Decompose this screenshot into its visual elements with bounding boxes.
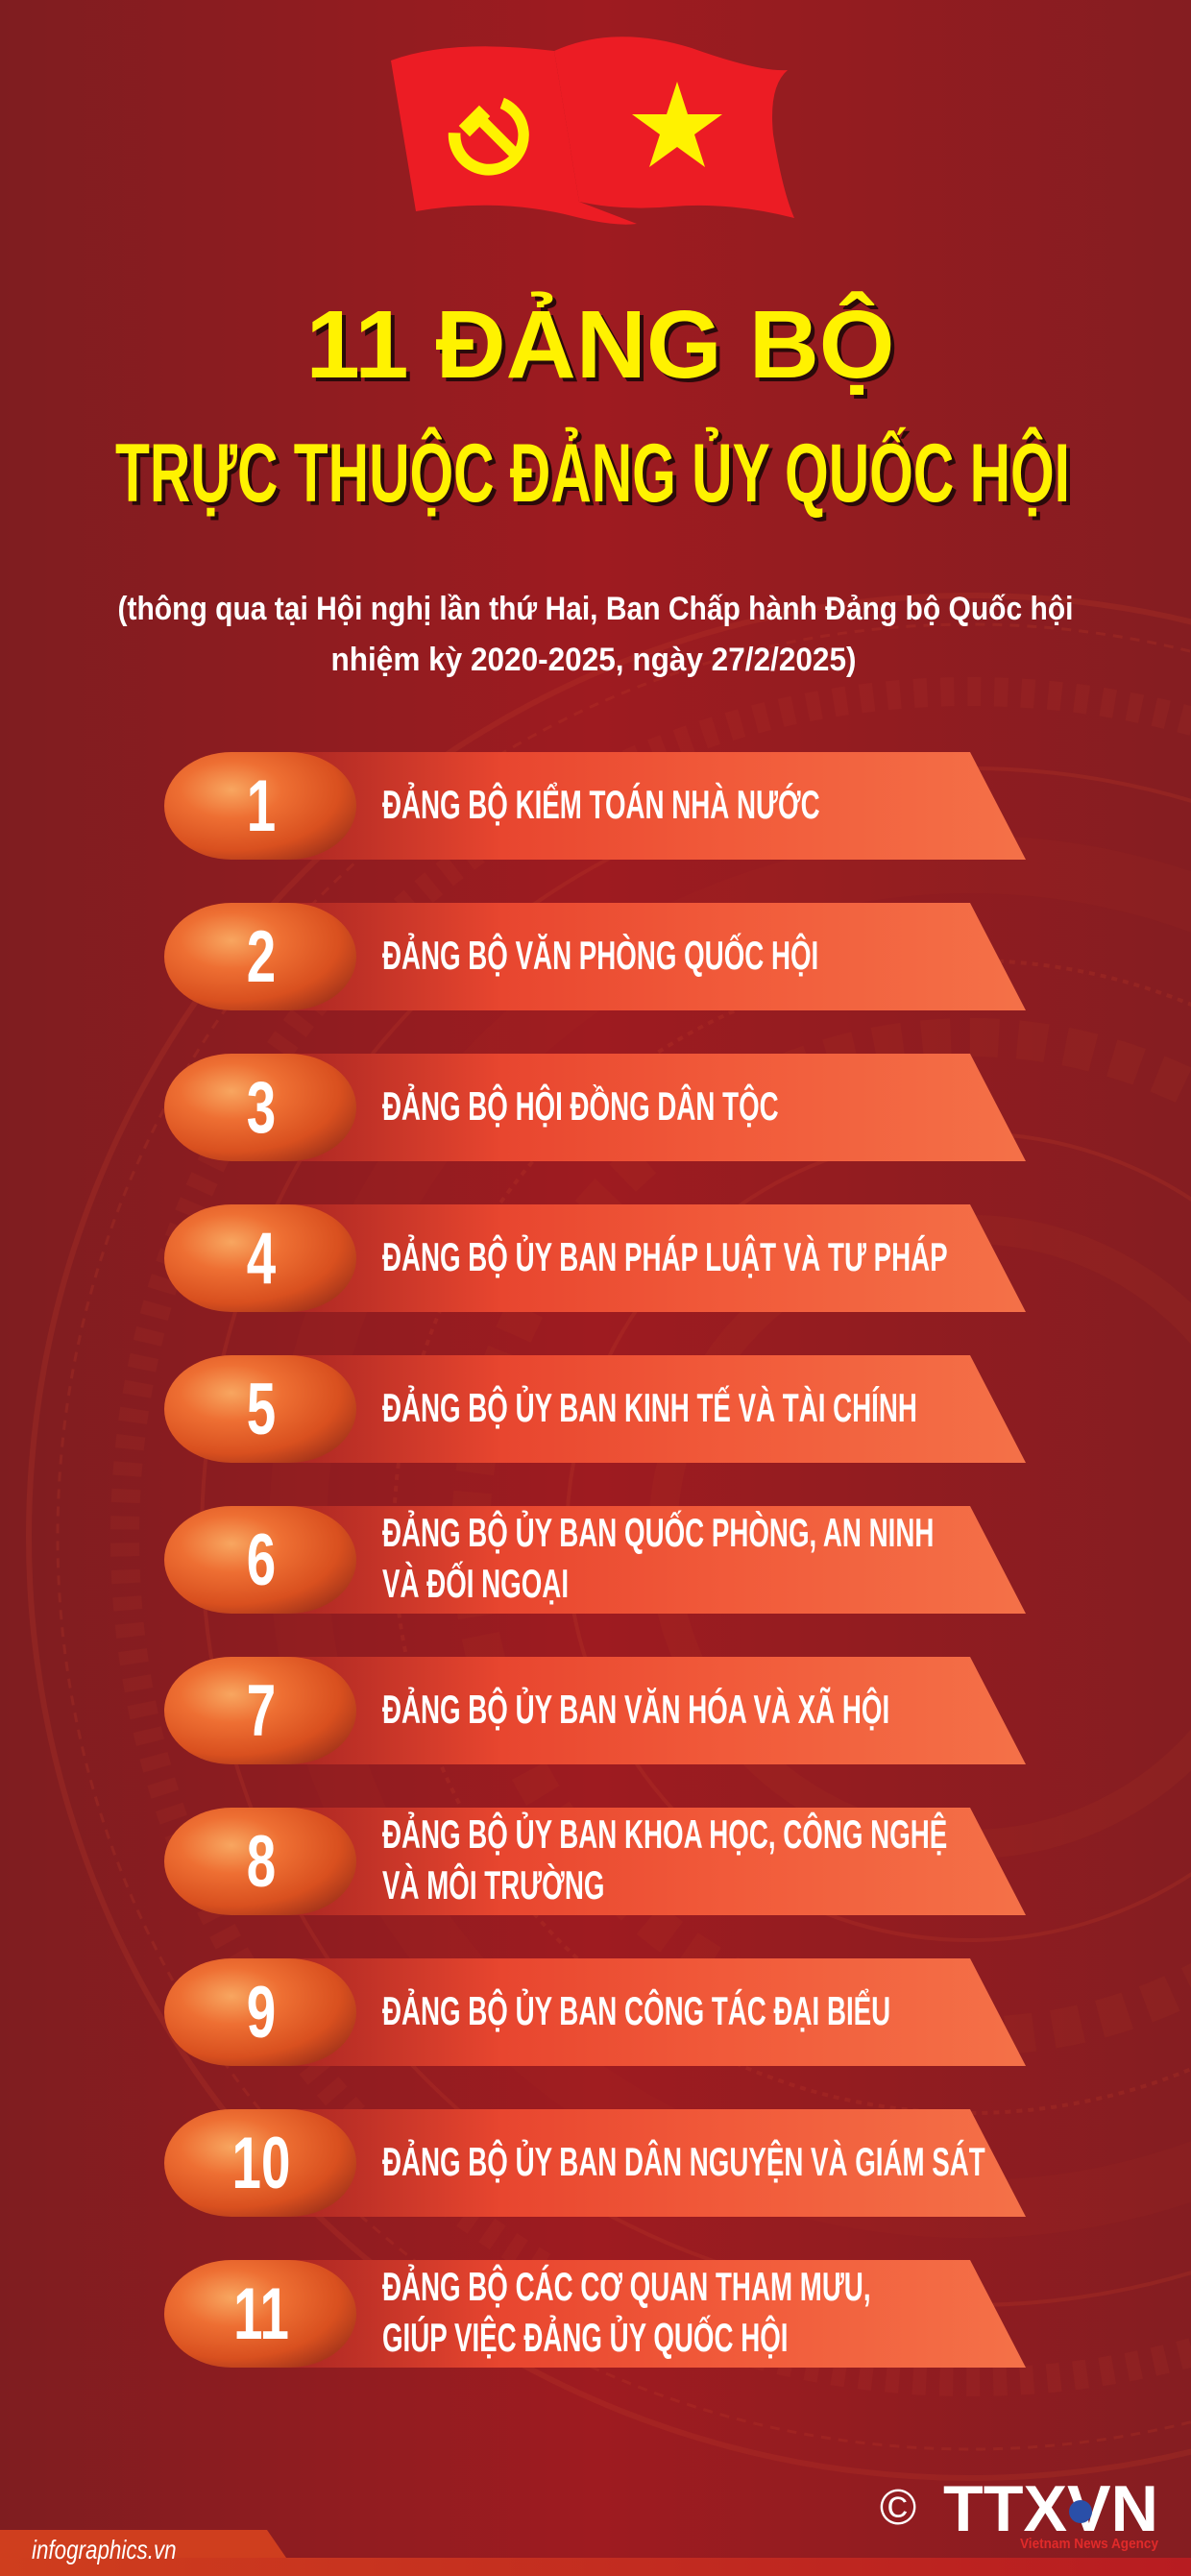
item 7: ĐẢNG BỘ ỦY BAN VĂN HÓA VÀ XÃ HỘI	[382, 1687, 889, 1732]
item 1	[164, 752, 1026, 860]
item 8	[164, 1808, 1026, 1915]
item 9: 9	[247, 1972, 276, 2054]
item 8: ĐẢNG BỘ ỦY BAN KHOA HỌC, CÔNG NGHỆ	[382, 1811, 947, 1857]
item 7	[164, 1657, 1026, 1764]
item 3: ĐẢNG BỘ HỘI ĐỒNG DÂN TỘC	[382, 1083, 779, 1129]
item 5: 5	[247, 1369, 276, 1450]
item 6: VÀ ĐỐI NGOẠI	[382, 1561, 569, 1606]
item 3	[164, 1054, 1026, 1161]
item 6: ĐẢNG BỘ ỦY BAN QUỐC PHÒNG, AN NINH	[382, 1510, 934, 1555]
footer source text: infographics.vn	[32, 2536, 177, 2565]
item 10	[164, 2109, 1026, 2217]
item 9: ĐẢNG BỘ ỦY BAN CÔNG TÁC ĐẠI BIỂU	[382, 1988, 890, 2033]
subtitle: (thông qua tại Hội nghị lần thứ Hai, Ban Chấp hành Đảng bộ Quốc hội	[117, 591, 1074, 627]
item 11: GIÚP VIỆC ĐẢNG ỦY QUỐC HỘI	[382, 2315, 788, 2360]
item 6	[164, 1506, 1026, 1614]
item 10: ĐẢNG BỘ ỦY BAN DÂN NGUYỆN VÀ GIÁM SÁT	[382, 2139, 985, 2184]
item 4: ĐẢNG BỘ ỦY BAN PHÁP LUẬT VÀ TƯ PHÁP	[382, 1234, 948, 1279]
item 7: 7	[247, 1670, 276, 1752]
item 1: 1	[247, 766, 276, 847]
logo: TTXVN: ©	[880, 2480, 916, 2536]
item 4: 4	[247, 1218, 276, 1300]
title	[115, 290, 1074, 523]
flag: party	[391, 46, 637, 225]
flags	[391, 36, 794, 225]
footer bar	[0, 2530, 1191, 2576]
item 4	[164, 1204, 1026, 1312]
item 11: ĐẢNG BỘ CÁC CƠ QUAN THAM MƯU,	[382, 2264, 871, 2309]
item 5	[164, 1355, 1026, 1463]
item 2: 2	[247, 916, 276, 998]
background drum pattern	[29, 595, 1191, 2478]
subtitle	[117, 591, 1074, 678]
item 10: 10	[232, 2123, 290, 2204]
item 2	[164, 903, 1026, 1010]
item 8: VÀ MÔI TRƯỜNG	[382, 1862, 604, 1908]
item 11	[164, 2260, 1026, 2368]
item 8: 8	[247, 1821, 276, 1903]
item 1: ĐẢNG BỘ KIỂM TOÁN NHÀ NƯỚC	[382, 782, 820, 827]
list of 11 party committees	[164, 752, 1026, 2368]
subtitle: nhiệm kỳ 2020-2025, ngày 27/2/2025)	[330, 642, 857, 678]
logo: TTXVN: Vietnam News Agency	[1020, 2536, 1159, 2552]
item 2: ĐẢNG BỘ VĂN PHÒNG QUỐC HỘI	[382, 933, 818, 978]
item 9	[164, 1958, 1026, 2066]
logo: TTXVN: TTXVN	[943, 2472, 1158, 2545]
item 5: ĐẢNG BỘ ỦY BAN KINH TẾ VÀ TÀI CHÍNH	[382, 1385, 917, 1430]
item 11: 11	[233, 2273, 289, 2355]
title: 11 ĐẢNG BỘ	[309, 294, 899, 402]
flag: national	[554, 36, 794, 218]
item 6: 6	[247, 1519, 276, 1601]
item 3: 3	[247, 1067, 276, 1149]
title: 11 ĐẢNG BỘ	[305, 290, 895, 399]
